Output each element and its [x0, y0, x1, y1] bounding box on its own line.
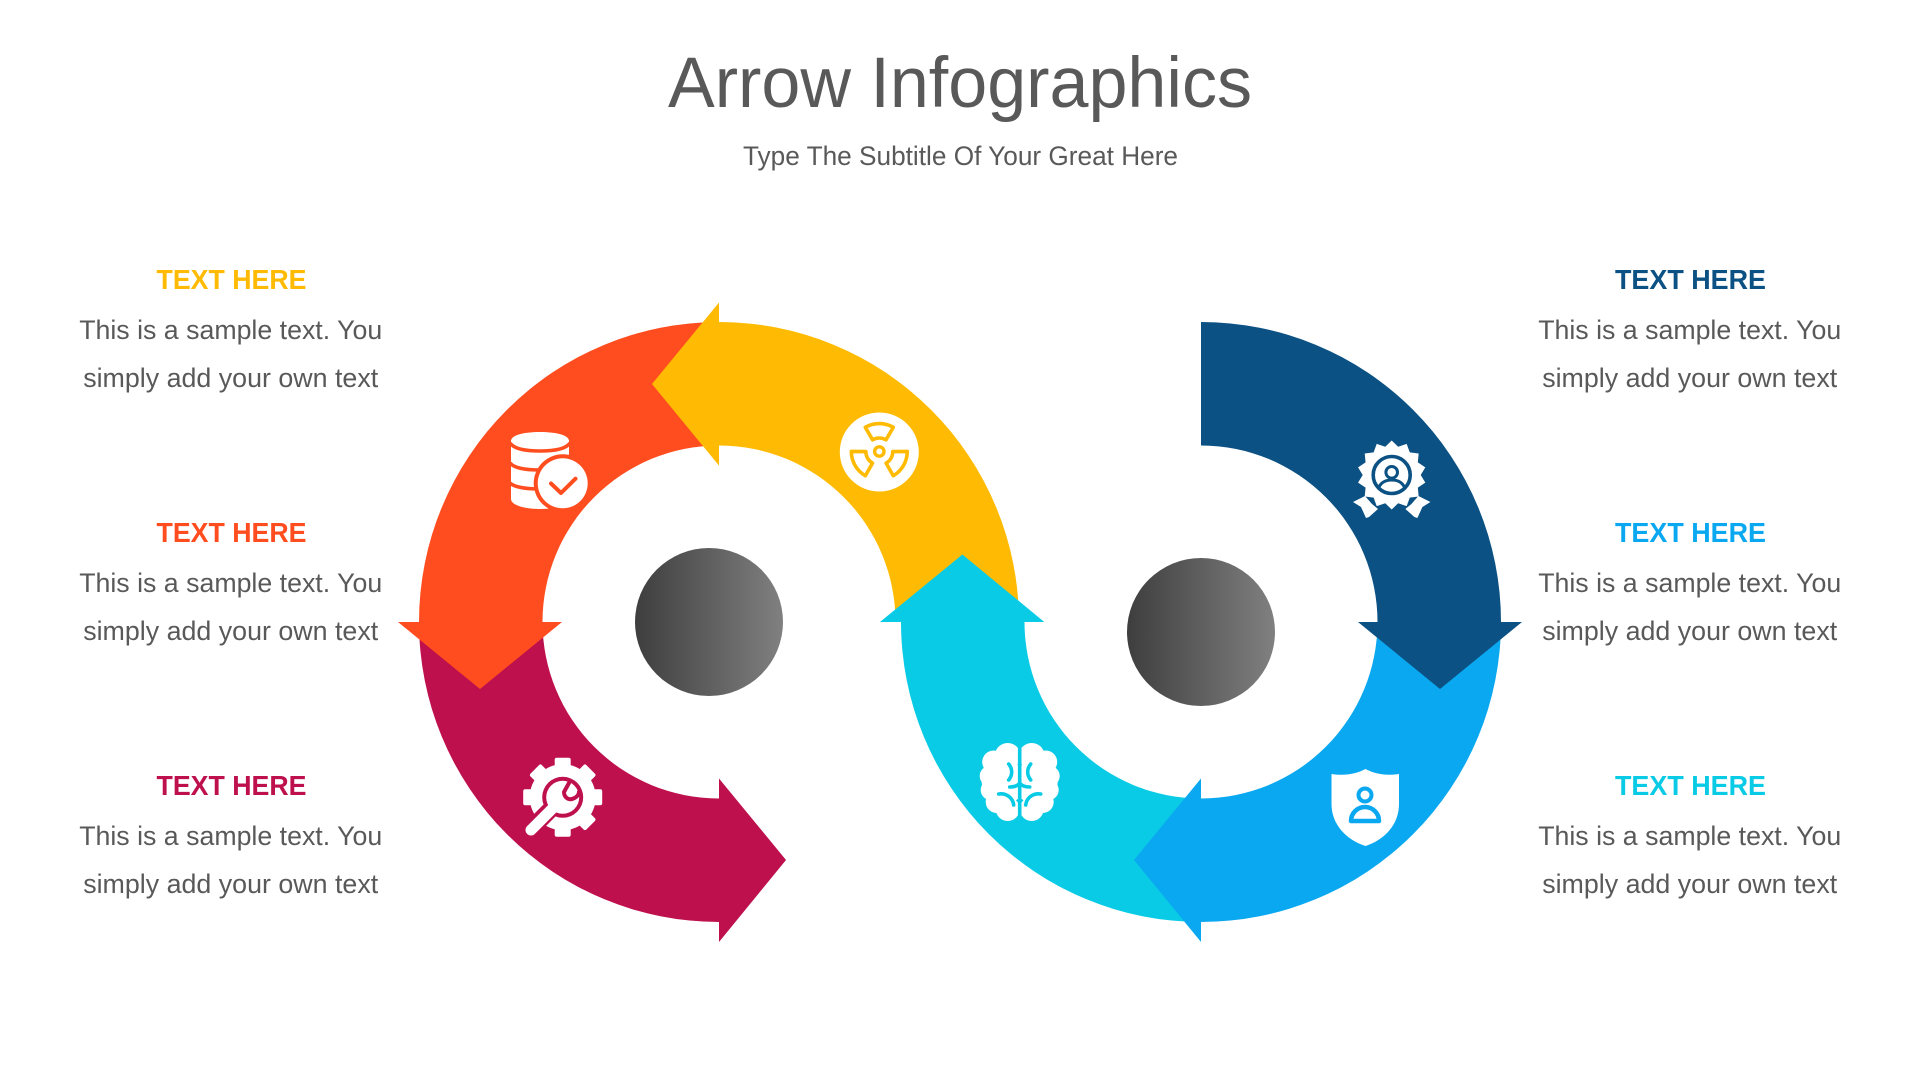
right text block: blue: This is a sample text. You — [1538, 568, 1841, 598]
left text block: crimson: simply add your own text — [83, 869, 379, 899]
arrow: crimson — [419, 622, 786, 942]
right text block: cyan: This is a sample text. You — [1538, 821, 1841, 851]
right text block: dark blue: TEXT HERE — [1615, 264, 1766, 295]
icon: award badge with person — [1353, 440, 1430, 518]
icon: shield with person — [1332, 769, 1399, 846]
subtitle: Type The Subtitle Of Your Great Here — [743, 141, 1178, 171]
icon: gear with wrench — [523, 758, 602, 837]
arrow: orange — [398, 322, 719, 689]
left text block: orange: This is a sample text. You — [79, 568, 382, 598]
right text block: blue — [1538, 517, 1841, 646]
left text block: yellow: TEXT HERE — [156, 264, 306, 295]
left text block: crimson — [79, 770, 382, 899]
right text block: blue: simply add your own text — [1542, 616, 1838, 646]
arrow: yellow — [652, 302, 1019, 622]
right text block: cyan — [1538, 770, 1841, 899]
right text block: cyan: simply add your own text — [1542, 869, 1838, 899]
left text block: crimson: TEXT HERE — [156, 770, 306, 801]
arrow: blue — [1134, 622, 1501, 942]
title: Arrow Infographics — [668, 44, 1252, 123]
left grey circle — [635, 548, 783, 696]
right text block: dark blue — [1538, 264, 1841, 393]
right text block: blue: TEXT HERE — [1615, 517, 1766, 548]
right grey circle — [1127, 558, 1275, 706]
right text block: dark blue: This is a sample text. You — [1538, 315, 1841, 345]
left text block: yellow: simply add your own text — [83, 363, 379, 393]
left text block: orange: TEXT HERE — [156, 517, 306, 548]
icon: brain — [980, 742, 1060, 822]
left text block: yellow: This is a sample text. You — [79, 315, 382, 345]
icon: radiation — [840, 412, 919, 492]
left text block: orange: simply add your own text — [83, 616, 379, 646]
right text block: cyan: TEXT HERE — [1615, 770, 1766, 801]
left text block: orange — [79, 517, 382, 646]
left text block: crimson: This is a sample text. You — [79, 821, 382, 851]
arrow: cyan — [880, 554, 1201, 922]
arrow: dark blue — [1201, 322, 1522, 689]
icon: database with check — [510, 432, 592, 512]
left text block: yellow — [79, 264, 382, 393]
right text block: dark blue: simply add your own text — [1542, 363, 1838, 393]
